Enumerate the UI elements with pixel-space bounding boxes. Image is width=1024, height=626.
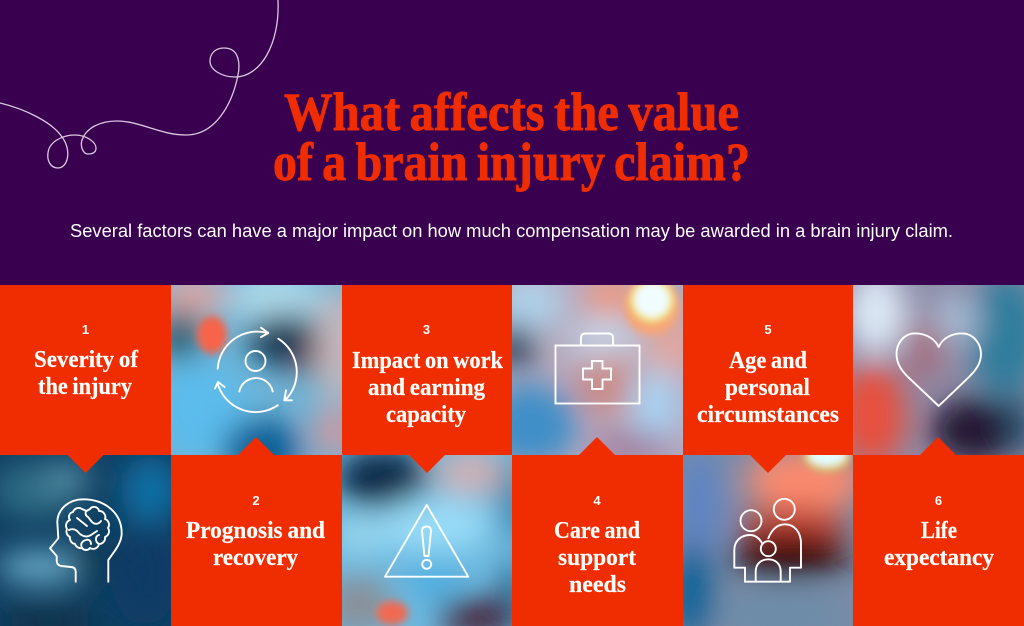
icon: heart bbox=[896, 333, 981, 406]
panel: factor 4: support bbox=[558, 545, 636, 571]
panel: image tile with brain icon bbox=[0, 455, 179, 626]
panel: factor 6: expectancy bbox=[884, 545, 994, 571]
panel: image tile with medical case icon bbox=[512, 285, 683, 455]
panel: factor 6: Life bbox=[921, 518, 957, 544]
panel: image tile with heart icon bbox=[853, 285, 1024, 455]
panel: factor 1 bbox=[0, 285, 171, 473]
panel: image tile with family icon bbox=[683, 455, 853, 626]
header background bbox=[0, 0, 1024, 285]
panel: factor 6 bbox=[853, 437, 1024, 626]
icon: head with brain bbox=[50, 499, 122, 582]
panel: factor 4: 4 bbox=[593, 493, 601, 508]
panel: factor 6: 6 bbox=[935, 493, 942, 508]
panel: factor 3: Impact on work bbox=[352, 348, 504, 374]
arrow: pointer down bbox=[68, 455, 104, 473]
panel: factor 5: Age and bbox=[729, 348, 808, 374]
panel: image tile with person cycle icon bbox=[171, 285, 342, 455]
arrow: pointer up bbox=[579, 437, 615, 455]
panel: factor 3: and earning bbox=[368, 375, 485, 401]
icon: family bbox=[734, 499, 801, 582]
arrow: pointer up bbox=[920, 437, 956, 455]
panel: factor 1: Severity of bbox=[34, 347, 139, 373]
panel: factor 5: circumstances bbox=[697, 402, 839, 428]
arrow: pointer down bbox=[750, 455, 786, 473]
panel: factor 2: Prognosis and bbox=[186, 518, 326, 544]
title: of a brain injury claim? bbox=[273, 132, 750, 192]
panel: factor 1: the injury bbox=[38, 374, 132, 400]
panel: factor 2 bbox=[171, 437, 342, 626]
title bbox=[273, 82, 750, 192]
subtitle: Several factors can have a major impact on how much compensation may be awarded in a brain injury claim. bbox=[70, 221, 953, 241]
panel: factor 5: 5 bbox=[764, 322, 772, 337]
icon: person with cycle arrows bbox=[215, 328, 297, 412]
panel: factor 2: 2 bbox=[252, 493, 260, 508]
panel: factor 3: capacity bbox=[386, 402, 466, 428]
icon: medical case bbox=[556, 334, 640, 404]
arrow: pointer down bbox=[409, 455, 445, 473]
panel: factor 4: needs bbox=[569, 572, 626, 598]
icon: warning triangle bbox=[385, 505, 468, 577]
panel: factor 1: 1 bbox=[82, 322, 89, 337]
panel: factor 3 bbox=[342, 285, 512, 473]
panel: factor 4: Care and bbox=[554, 518, 641, 544]
decorative swirling line bbox=[0, 0, 278, 168]
panel: factor 2: recovery bbox=[213, 545, 298, 571]
panel: factor 5 bbox=[683, 285, 853, 473]
title: What affects the value bbox=[284, 82, 739, 142]
arrow: pointer up bbox=[238, 437, 274, 455]
panel: image tile with warning icon bbox=[342, 455, 512, 626]
panel: factor 5: personal bbox=[725, 375, 810, 401]
panel: factor 3: 3 bbox=[423, 322, 430, 337]
panel: factor 4 bbox=[512, 437, 683, 626]
